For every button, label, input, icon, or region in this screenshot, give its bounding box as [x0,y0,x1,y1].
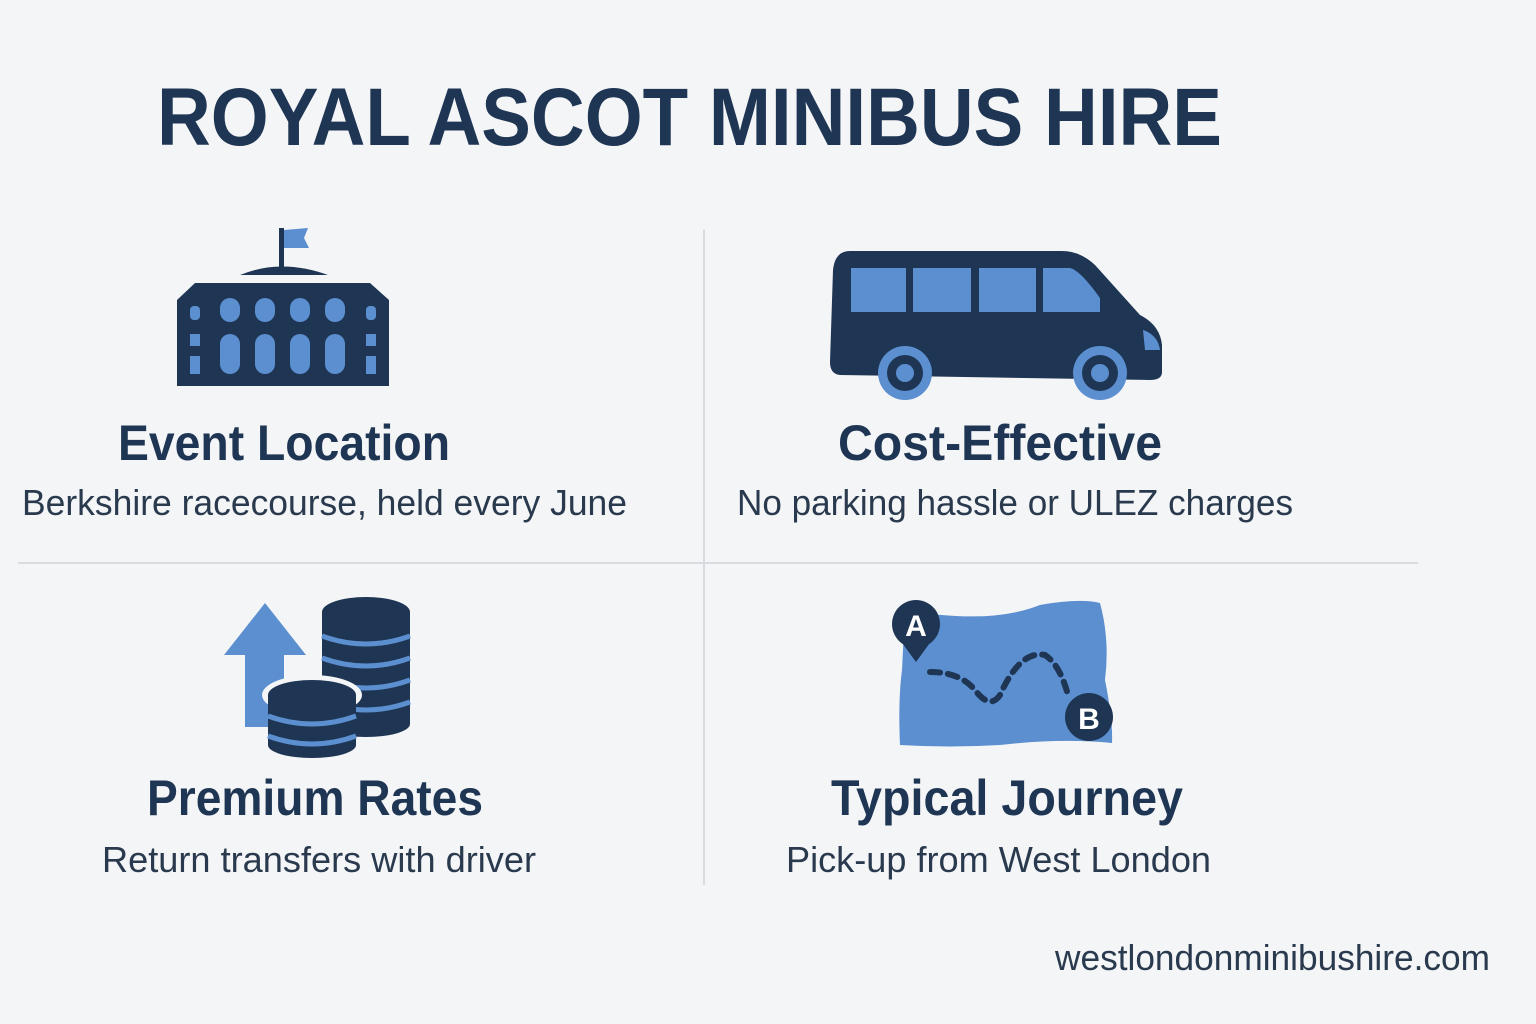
icon: map route [892,600,1113,746]
text: cost-effective: No parking hassle or ULEZ charges [737,482,1293,523]
panel: typical journey [786,600,1211,880]
heading: typical journey: Typical Journey [831,770,1183,826]
panel: premium rates [102,597,536,880]
title: ROYAL ASCOT MINIBUS HIRE [157,72,1222,163]
icon: arrow and coins [224,597,410,758]
heading: event location: Event Location [118,415,450,471]
icon: map route: B [1078,703,1100,736]
footer url: westlondonminibushire.com [1054,937,1490,978]
icon: building [177,228,389,386]
heading: cost-effective: Cost-Effective [838,415,1162,471]
icon: minibus [830,251,1162,400]
icon: map route: A [905,610,927,643]
panel: cost-effective [737,251,1293,523]
text: event location: Berkshire racecourse, held every June [22,482,627,523]
text: premium rates: Return transfers with driver [102,839,536,880]
panel: event location [22,228,627,523]
heading: premium rates: Premium Rates [147,770,483,826]
text: typical journey: Pick-up from West London [786,839,1211,880]
